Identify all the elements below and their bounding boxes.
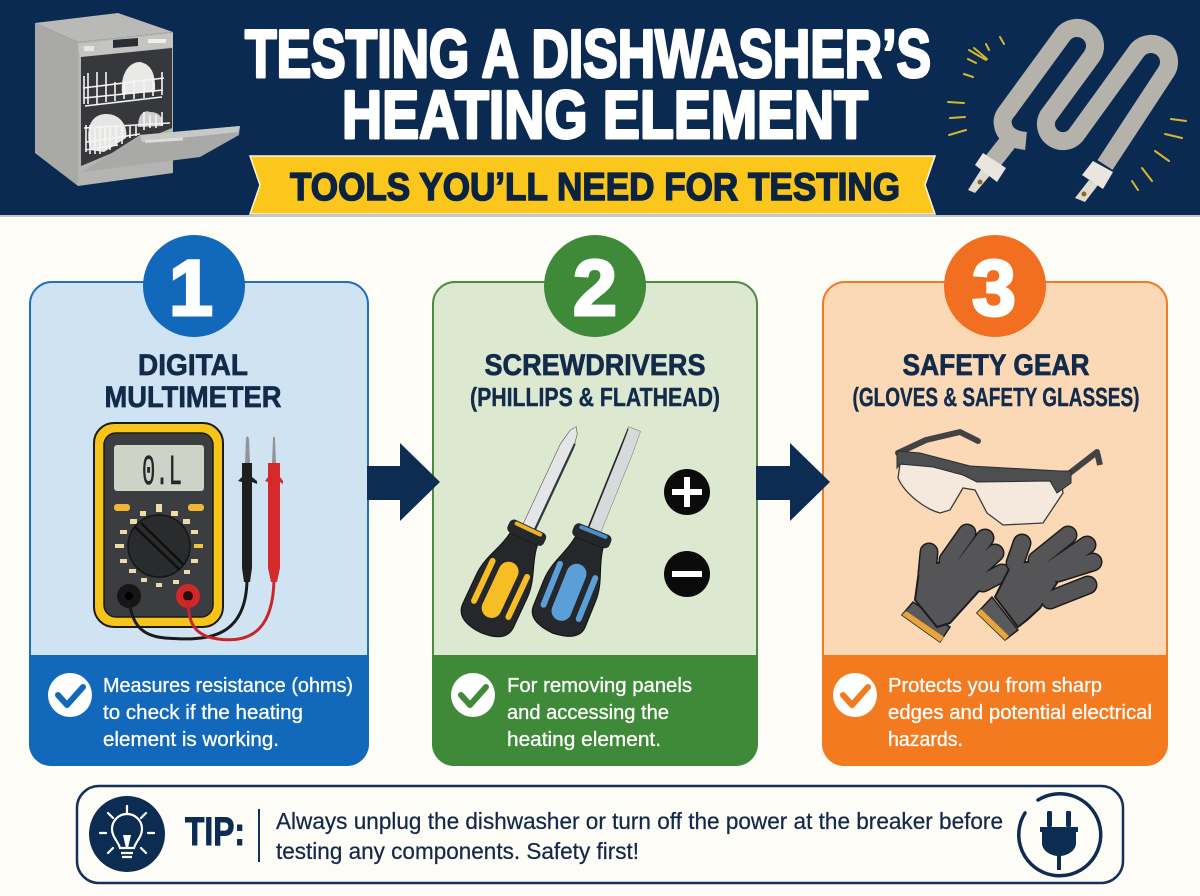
- number badge 3: [944, 235, 1046, 337]
- heading: screwdrivers: SCREWDRIVERS: [484, 349, 706, 382]
- icon: multimeter: [94, 423, 283, 640]
- panel footer: multimeter description: element is working.: [103, 729, 279, 751]
- panel: digital multimeter: [29, 235, 369, 766]
- tip text: Always unplug the dishwasher or turn off the power at the breaker before: [276, 808, 1003, 834]
- heading: screwdrivers: [470, 349, 720, 412]
- heading: safety gear: [852, 349, 1140, 412]
- tip divider: [258, 809, 260, 862]
- arrow: step 1 to step 2: [367, 443, 440, 521]
- panel footer: screwdrivers description: [432, 655, 758, 766]
- icon: flathead screwdriver: [527, 419, 661, 644]
- icon: plus symbol: [664, 469, 710, 515]
- panel footer: safety gear description: hazards.: [888, 729, 963, 751]
- heading: screwdrivers: (PHILLIPS & FLATHEAD): [470, 382, 720, 412]
- panel: safety gear: [822, 235, 1168, 766]
- arrow: step 2 to step 3: [756, 443, 830, 521]
- panel: screwdrivers: [432, 235, 758, 766]
- sub: red probe and lead: [188, 436, 283, 640]
- panel footer: screwdrivers description: and accessing the: [507, 702, 669, 724]
- panel footer: safety gear description: Protects you from sharp: [888, 675, 1102, 697]
- number badge 1: [143, 235, 245, 337]
- ribbon: tools subtitle: TOOLS YOU’LL NEED FOR TESTING: [290, 166, 900, 209]
- icon: lightbulb: [89, 796, 165, 872]
- panel footer: multimeter description: [29, 655, 369, 766]
- tip box: [77, 786, 1123, 883]
- panel footer: safety gear description: edges and potential electrical: [888, 702, 1152, 724]
- number badge 2: [544, 235, 646, 337]
- tip text: testing any components. Safety first!: [276, 838, 639, 864]
- tip label: TIP:: [185, 810, 245, 854]
- number badge 3: 3: [972, 243, 1016, 332]
- icon: right glove: [977, 535, 1093, 640]
- title: [245, 16, 931, 153]
- icon: power plug: [1019, 794, 1101, 876]
- sub: display: 0.L: [142, 448, 182, 497]
- heading: digital multimeter: [104, 349, 282, 414]
- panel footer: safety gear description: [822, 655, 1168, 766]
- sub: right terminal: [1075, 161, 1113, 202]
- number badge 1: 1: [169, 243, 213, 332]
- ribbon: tools subtitle: [250, 156, 935, 214]
- icon: phillips screwdriver: [455, 415, 602, 644]
- panel footer: multimeter description: to check if the heating: [103, 702, 303, 724]
- sub: left terminal: [968, 153, 1006, 193]
- panel footer: screwdrivers description: For removing panels: [507, 675, 692, 697]
- header band: [0, 0, 1200, 215]
- title: TESTING A DISHWASHER’S: [245, 16, 931, 92]
- icon: dishwasher: [35, 13, 240, 186]
- icon: minus symbol: [664, 551, 710, 597]
- icon: safety glasses: [897, 432, 1100, 525]
- header bottom edge: [0, 215, 1200, 217]
- sub: black jack: [117, 584, 141, 608]
- panel footer: screwdrivers description: heating element.: [507, 729, 661, 751]
- heading: digital multimeter: MULTIMETER: [104, 381, 282, 414]
- heading: safety gear: SAFETY GEAR: [902, 349, 1090, 382]
- icon: left glove: [902, 533, 1002, 642]
- tip text: [276, 808, 1003, 864]
- number badge 2: 2: [573, 243, 617, 332]
- sub: rotary dial: [128, 515, 190, 577]
- sub: display: [114, 445, 204, 497]
- title: HEATING ELEMENT: [342, 77, 868, 153]
- icon: heating element: [948, 28, 1186, 202]
- sub: black probe and lead: [129, 436, 257, 639]
- sub: red jack: [176, 584, 200, 608]
- heading: digital multimeter: DIGITAL: [138, 349, 248, 382]
- panel footer: multimeter description: Measures resistance (ohms): [103, 675, 353, 697]
- sub: spark marks: [948, 37, 1186, 190]
